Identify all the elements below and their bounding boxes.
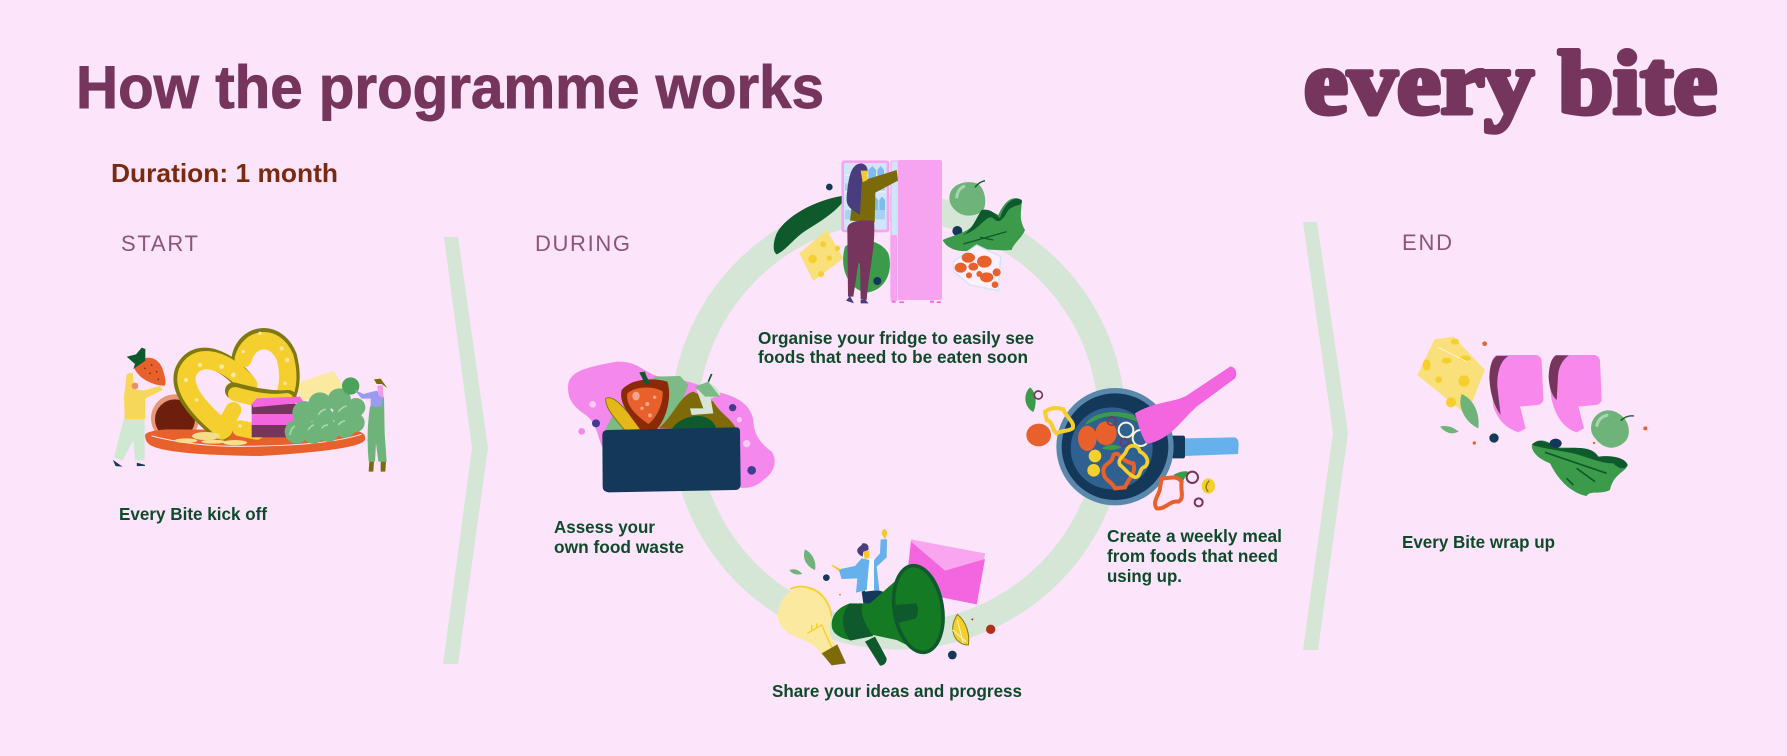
pretzel — [184, 338, 290, 432]
label: weekly meal: Create a weekly meal — [1107, 526, 1282, 546]
label: organise fridge: Organise your fridge to easily see — [758, 328, 1034, 348]
heading: during: DURING — [535, 231, 630, 256]
pan handle — [1172, 436, 1239, 458]
cheese wedge — [297, 371, 346, 402]
illustration: fridge and food — [774, 160, 1025, 303]
megaphone — [832, 562, 949, 666]
cheese — [1418, 337, 1484, 414]
illustration: food waste box — [568, 362, 775, 492]
apple — [949, 181, 985, 216]
title: How the programme works — [76, 54, 824, 121]
leaves — [1440, 394, 1479, 433]
woman — [846, 163, 898, 303]
ingredients in pan — [1078, 412, 1149, 488]
chevron arrow: during to end — [1303, 222, 1348, 650]
speech marks — [1489, 355, 1602, 432]
lemon slice — [953, 614, 969, 645]
blueberries — [592, 404, 756, 475]
man on megaphone — [832, 530, 887, 604]
berries — [948, 618, 995, 659]
berries and dots — [1473, 341, 1647, 448]
spinach — [943, 198, 1025, 251]
pink splash — [568, 362, 775, 488]
brownie — [151, 394, 199, 442]
cake — [252, 397, 304, 437]
spinach — [1532, 440, 1628, 496]
label: kick off: Every Bite kick off — [119, 504, 267, 524]
leaves and berry — [789, 549, 841, 595]
cucumber — [774, 196, 842, 254]
plate — [145, 429, 365, 456]
label: wrap up: Every Bite wrap up — [1402, 532, 1555, 552]
lettuce behind — [843, 240, 890, 293]
label: assess food waste: own food waste — [554, 537, 684, 557]
label: share ideas: Share your ideas and progress — [772, 681, 1022, 701]
fridge body — [890, 160, 942, 303]
person with strawberry — [114, 348, 166, 466]
light bulb — [778, 587, 846, 665]
illustration: kick off platter — [114, 332, 387, 472]
label: weekly meal: from foods that need — [1107, 546, 1278, 566]
slices on the plate — [175, 432, 247, 445]
spatula — [1135, 367, 1236, 444]
illustration: wrap up cheese, quotes and greens — [1418, 337, 1647, 496]
pan — [1056, 388, 1174, 505]
box — [602, 427, 741, 492]
heading: end: END — [1402, 230, 1452, 255]
illustration: frying pan — [1025, 367, 1239, 509]
label: assess food waste: Assess your — [554, 517, 655, 537]
person with green ball — [342, 377, 387, 472]
label: assess food waste — [554, 517, 684, 557]
apple — [1591, 410, 1634, 448]
heading: start: START — [121, 231, 198, 256]
logo: every bite: every bite — [1304, 34, 1717, 133]
scattered ingredients — [1025, 387, 1215, 509]
duration: Duration: 1 month — [111, 158, 338, 188]
envelope — [906, 539, 985, 604]
grapes — [285, 388, 365, 444]
chevron arrow: start to during — [443, 237, 488, 664]
bag of tomatoes — [953, 245, 1001, 291]
label: organise fridge: foods that need to be eaten soon — [758, 347, 1028, 367]
label: weekly meal: using up. — [1107, 566, 1182, 586]
cheese — [799, 230, 843, 281]
illustration: megaphone, bulb and envelope — [778, 530, 995, 666]
label: weekly meal — [1107, 526, 1282, 586]
label: organise fridge — [758, 328, 1034, 367]
cycle ring — [684, 208, 1112, 636]
produce in the box — [605, 372, 737, 431]
blueberries — [826, 184, 962, 285]
open fridge door — [843, 162, 888, 231]
